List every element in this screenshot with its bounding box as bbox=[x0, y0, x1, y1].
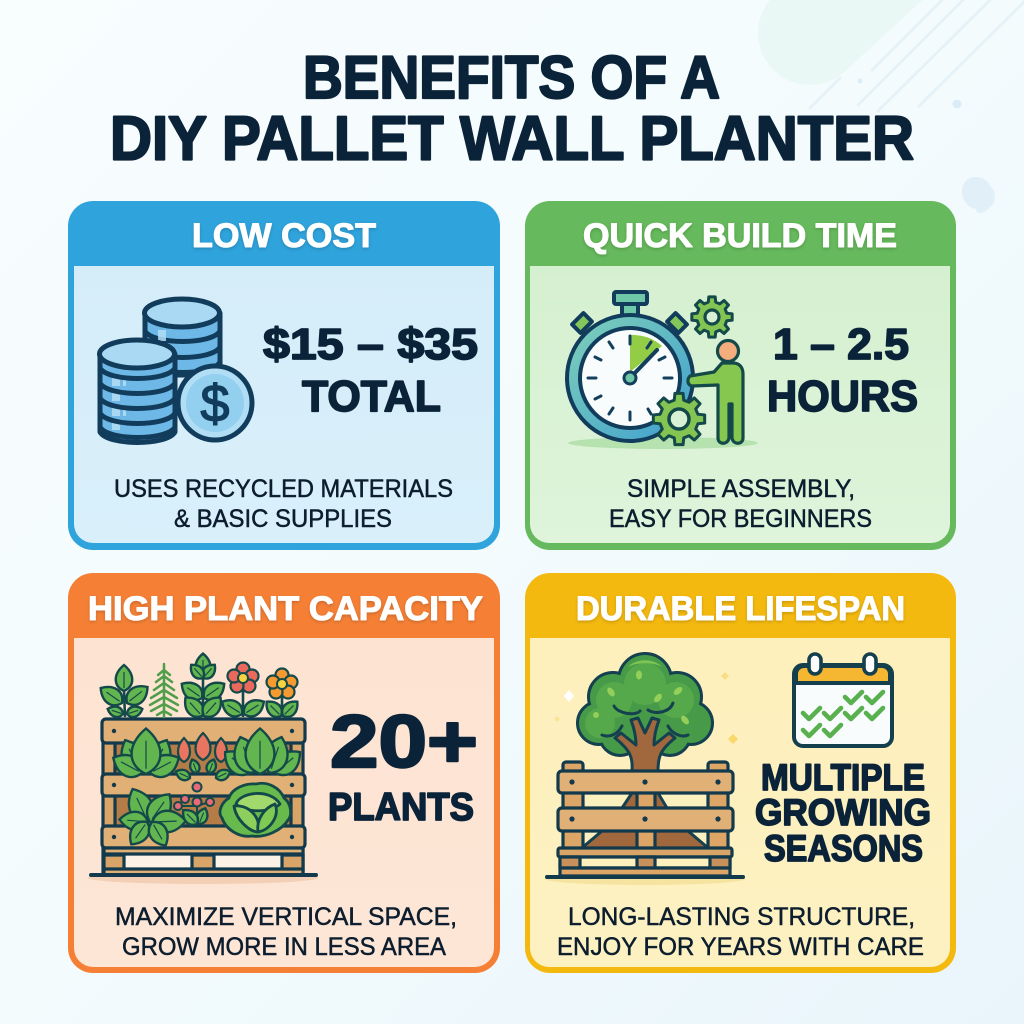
description: quick build time: SIMPLE ASSEMBLY, bbox=[627, 475, 855, 503]
panel: quick build time bbox=[525, 201, 956, 550]
panel: durable lifespan bbox=[525, 573, 956, 973]
title bbox=[110, 44, 914, 174]
description: low cost: USES RECYCLED MATERIALS bbox=[114, 475, 453, 503]
icon: pallet planter bbox=[88, 654, 318, 884]
icon: coin stacks bbox=[100, 299, 252, 442]
pallet frame bbox=[91, 719, 316, 875]
heading: low cost: LOW COST bbox=[192, 217, 376, 255]
description: high plant capacity: GROW MORE IN LESS AREA bbox=[122, 933, 446, 961]
description: durable lifespan: ENJOY FOR YEARS WITH CARE bbox=[557, 933, 924, 961]
icon: coin stacks: $ bbox=[201, 375, 230, 433]
description: durable lifespan: LONG-LASTING STRUCTURE, bbox=[568, 903, 915, 931]
stat: hours: 1 – 2.5 bbox=[773, 320, 909, 369]
description: low cost bbox=[114, 475, 453, 533]
stat: multiple growing seasons: GROWING bbox=[755, 792, 931, 833]
title: BENEFITS OF A bbox=[303, 44, 720, 111]
description: high plant capacity bbox=[115, 903, 457, 961]
stat: plants: 20+ bbox=[330, 700, 478, 783]
icon: stopwatch with person and gears bbox=[567, 292, 758, 449]
stat: cost: $15 – $35 bbox=[263, 320, 478, 369]
description: high plant capacity: MAXIMIZE VERTICAL SPACE, bbox=[115, 903, 457, 931]
stat: hours bbox=[767, 320, 918, 421]
middle row plants bbox=[108, 728, 307, 782]
tree canopy bbox=[579, 655, 711, 754]
stat: multiple growing seasons: SEASONS bbox=[764, 828, 923, 869]
heading: high plant capacity: HIGH PLANT CAPACITY bbox=[88, 590, 483, 628]
pallet bbox=[558, 762, 733, 876]
stat: hours: HOURS bbox=[767, 372, 918, 421]
description: durable lifespan bbox=[557, 903, 924, 961]
icon: tree in pallet bbox=[545, 655, 745, 885]
stat: plants: PLANTS bbox=[328, 786, 474, 829]
stat: cost: TOTAL bbox=[302, 372, 441, 421]
heading: durable lifespan: DURABLE LIFESPAN bbox=[576, 590, 905, 628]
icon: large gear bbox=[653, 393, 705, 445]
icon: person bbox=[688, 340, 743, 443]
description: quick build time bbox=[609, 475, 872, 533]
stat: plants bbox=[328, 700, 478, 829]
stat: multiple growing seasons: MULTIPLE bbox=[761, 757, 925, 798]
stat: cost bbox=[263, 320, 478, 421]
top row plants bbox=[96, 654, 302, 721]
icon: cabbage bbox=[220, 783, 291, 836]
panel: high plant capacity bbox=[68, 573, 500, 973]
description: low cost: & BASIC SUPPLIES bbox=[174, 505, 392, 533]
description: quick build time: EASY FOR BEGINNERS bbox=[609, 505, 872, 533]
panel: low cost bbox=[68, 201, 500, 550]
tree trunk bbox=[583, 703, 707, 847]
heading: quick build time: QUICK BUILD TIME bbox=[583, 217, 897, 255]
bottom row plants bbox=[119, 782, 291, 850]
title: DIY PALLET WALL PLANTER bbox=[110, 104, 914, 174]
stat: multiple growing seasons bbox=[755, 757, 931, 869]
icon: small gear bbox=[692, 297, 732, 337]
icon: calendar bbox=[794, 654, 892, 746]
